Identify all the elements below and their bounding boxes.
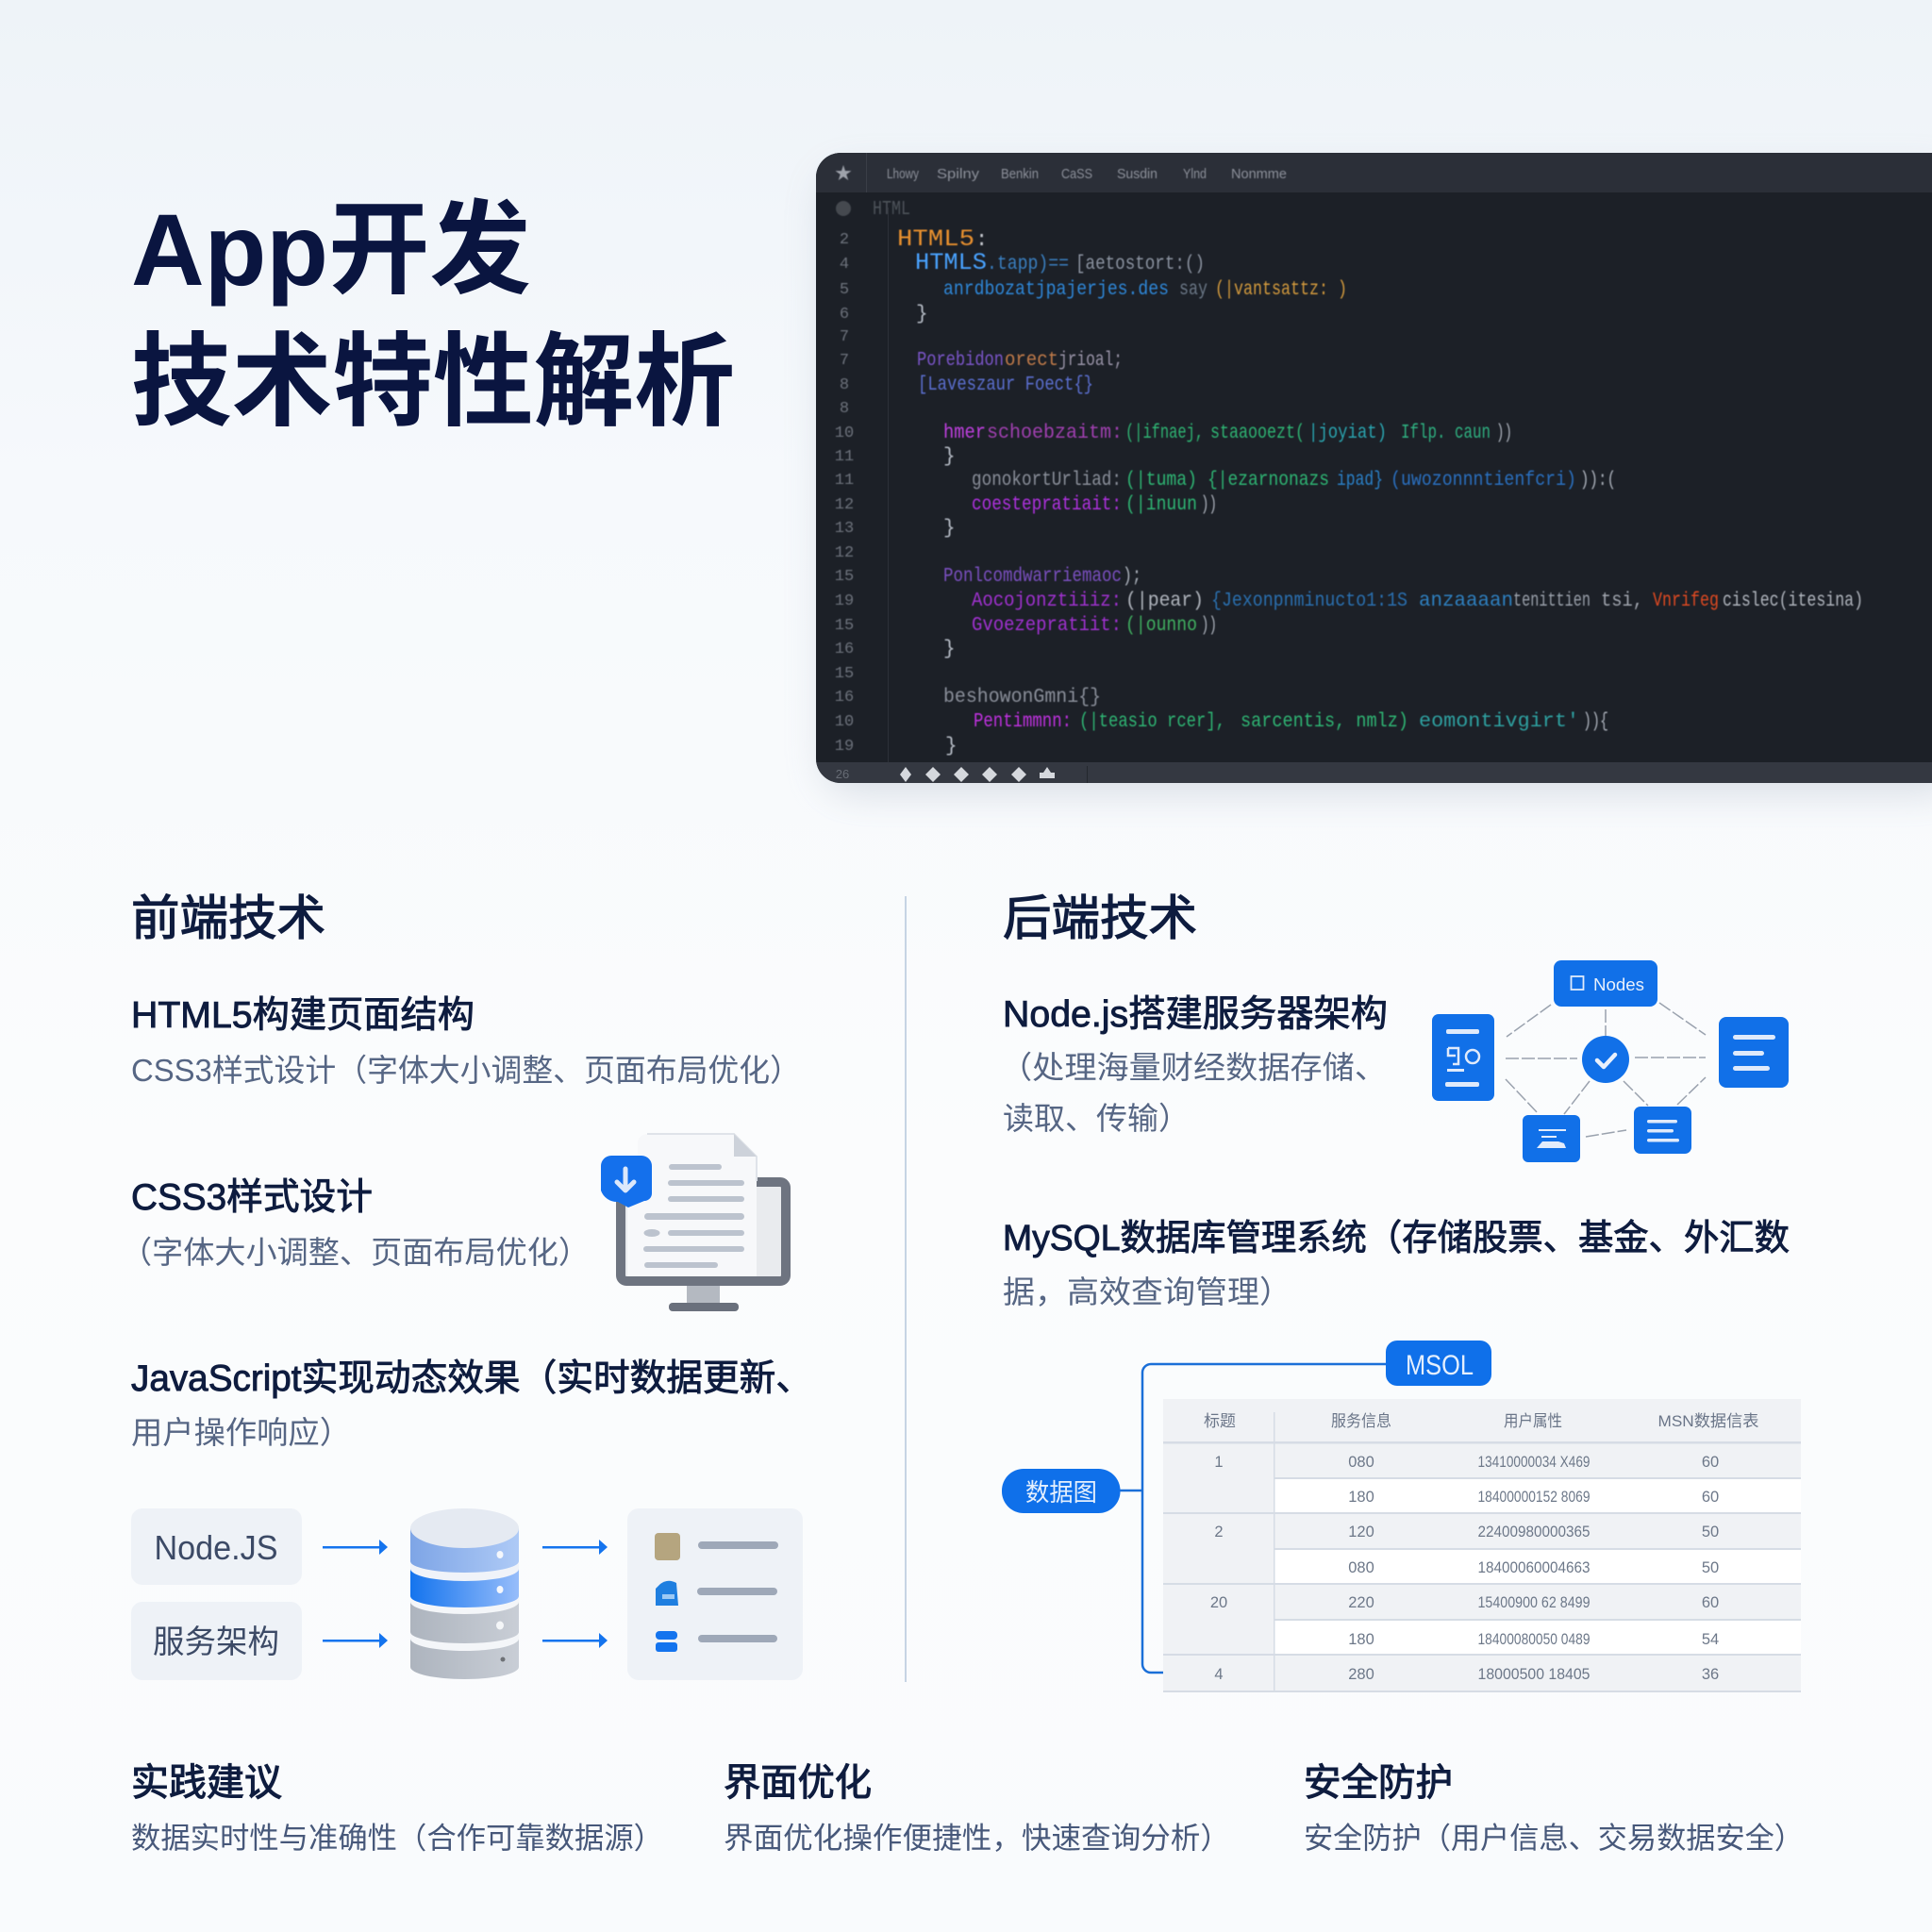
code lines: } <box>943 639 956 660</box>
text block: MySQL <box>1003 1219 1790 1309</box>
text block: HTML5: HTML5构建页面结构 <box>131 995 475 1036</box>
text block: HTML5 <box>131 995 801 1088</box>
text block: Node.js: 读取、传输） <box>1003 1101 1190 1136</box>
table header <box>1204 1412 1758 1430</box>
code lines: } <box>943 518 956 540</box>
pill: 数据图: 数据图 <box>1025 1478 1097 1507</box>
text block: CSS3 <box>121 1177 590 1270</box>
code lines: orect <box>1005 350 1058 372</box>
table rows: 220 <box>1348 1594 1374 1611</box>
code lines: anrdbozatjpajerjes.des <box>943 279 1169 301</box>
text block: JavaScript: JavaScript实现动态效果（实时数据更新、 <box>131 1358 812 1399</box>
editor toolbar: Spilny <box>937 166 980 182</box>
table <box>1163 1399 1801 1692</box>
code lines: {Jexonpnminucto1:1S <box>1211 591 1407 612</box>
table rows: 60 <box>1702 1489 1719 1506</box>
text block: Node.js: Node.js搭建服务器架构 <box>1003 994 1388 1035</box>
editor status bar icons <box>836 766 1088 783</box>
editor toolbar: Benkin <box>1001 166 1039 182</box>
code lines: Ponlcomdwarriemaoc <box>943 566 1122 588</box>
code lines: )) <box>1201 494 1217 516</box>
code lines: eomontivgirt' <box>1419 711 1579 733</box>
chip: Node.JS: Node.JS <box>155 1528 277 1567</box>
icon: database <box>410 1508 519 1679</box>
chip: Node.JS <box>131 1508 302 1585</box>
line numbers: 10 <box>835 713 854 731</box>
block: 实践建议: 数据实时性与准确性（合作可靠数据源） <box>131 1821 663 1855</box>
code lines: Iflp. caun <box>1401 423 1491 444</box>
code lines: {|ezarnonazs <box>1208 470 1329 491</box>
line numbers: 11 <box>835 472 854 490</box>
line numbers: 8 <box>840 400 849 418</box>
code lines: jrioal; <box>1058 350 1123 372</box>
code lines: (|teasio rcer], <box>1079 711 1225 733</box>
editor toolbar: Ylnd <box>1183 166 1207 182</box>
button: MSOL: MSOL <box>1406 1350 1474 1381</box>
heading: 前端技术: 前端技术 <box>131 891 325 945</box>
table rows: 22400980000365 <box>1477 1524 1591 1541</box>
code lines: cislec(itesina) <box>1723 591 1863 612</box>
code lines: (|ounno <box>1125 615 1197 637</box>
line numbers: 15 <box>835 568 854 586</box>
code lines: say <box>1179 279 1208 301</box>
table rows: 1 <box>1214 1454 1224 1471</box>
connectors <box>1506 1003 1706 1137</box>
table rows: 50 <box>1702 1559 1719 1576</box>
chip: 服务架构 <box>131 1602 302 1680</box>
node: bottom left <box>1523 1115 1580 1162</box>
code lines: |joyiat) <box>1308 423 1387 444</box>
code lines: ipad} <box>1337 470 1383 491</box>
table header: 标题 <box>1204 1412 1236 1430</box>
table rows: 18000500 18405 <box>1477 1666 1591 1683</box>
code lines: schoebzaitm: <box>987 423 1123 444</box>
code lines: HTMLS <box>915 249 987 276</box>
block: 界面优化: 界面优化 <box>724 1762 872 1804</box>
code lines: tenittien <box>1513 591 1591 612</box>
text block: Node.js: （处理海量财经数据存储、 <box>1000 1050 1387 1085</box>
table rows: 4 <box>1214 1666 1224 1683</box>
arrows <box>323 1540 608 1648</box>
icon: monitor and document <box>601 1134 786 1311</box>
node: bottom right <box>1634 1107 1691 1154</box>
block: 实践建议: 实践建议 <box>131 1762 282 1804</box>
code lines: Vnrifeg <box>1653 591 1719 612</box>
table rows: 180 <box>1348 1631 1374 1648</box>
code lines: )) <box>1496 423 1512 444</box>
line numbers: 2 <box>840 231 849 249</box>
editor toolbar: Susdin <box>1117 166 1158 182</box>
title: 技术特性解析 <box>131 325 735 439</box>
node: Node.js <box>1554 960 1657 1007</box>
line numbers: 13 <box>835 520 854 538</box>
editor toolbar <box>835 164 1287 183</box>
line numbers: 12 <box>835 544 854 562</box>
line numbers: 19 <box>835 738 854 756</box>
table header: MSN数据信表 <box>1658 1412 1758 1430</box>
editor toolbar: Lhowy <box>887 166 919 182</box>
table rows: 60 <box>1702 1454 1719 1471</box>
code lines: : <box>975 228 988 252</box>
chip: 服务架构: 服务架构 <box>153 1624 279 1660</box>
editor toolbar: CaSS <box>1061 166 1092 182</box>
editor toolbar: ★ <box>835 164 852 183</box>
code lines: hmer <box>943 423 986 444</box>
node: right list <box>1719 1017 1789 1088</box>
code lines <box>873 199 1863 758</box>
code lines: Gvoezepratiit: <box>972 615 1122 637</box>
code lines: (|pear) <box>1125 591 1204 612</box>
table rows: 18400080050 0489 <box>1477 1631 1591 1648</box>
table rows: 20 <box>1210 1594 1227 1611</box>
table rows: 080 <box>1348 1454 1374 1471</box>
pill: 数据图 <box>1002 1469 1121 1513</box>
node: left document <box>1432 1014 1494 1101</box>
panel: code editor <box>816 153 1932 792</box>
code lines: (|vantsattz: ) <box>1215 279 1347 301</box>
table rows: 50 <box>1702 1524 1719 1541</box>
code lines: HTML <box>873 199 910 221</box>
text block: MySQL: MySQL数据库管理系统（存储股票、基金、外汇数 <box>1003 1219 1790 1258</box>
line numbers: 15 <box>835 665 854 683</box>
code lines: )) <box>1201 615 1217 637</box>
line numbers: 19 <box>835 592 854 610</box>
block: 界面优化 <box>724 1762 1230 1855</box>
code lines: (|inuun <box>1125 494 1197 516</box>
text block: CSS3: （字体大小调整、页面布局优化） <box>121 1235 590 1270</box>
code lines: sarcentis, nmlz) <box>1241 711 1408 733</box>
code lines: .tapp)== <box>987 254 1069 275</box>
block: 实践建议 <box>131 1762 663 1855</box>
text block: HTML5: CSS3样式设计（字体大小调整、页面布局优化） <box>131 1053 801 1088</box>
line numbers: 7 <box>840 352 849 370</box>
line numbers: 15 <box>835 617 854 635</box>
divider <box>905 896 907 1682</box>
table rows: 180 <box>1348 1489 1374 1506</box>
editor status bar icons: 26 <box>836 767 849 781</box>
code lines: Porebidon <box>917 350 1004 372</box>
connectors <box>1120 1364 1386 1673</box>
code lines: } <box>945 736 958 758</box>
text block: MySQL: 据，高效查询管理） <box>1003 1274 1291 1309</box>
table rows: 13410000034 X469 <box>1477 1454 1591 1471</box>
code lines: Aocojonztiiiz: <box>972 591 1122 612</box>
diagram: architecture flow <box>131 1508 803 1680</box>
table rows: 280 <box>1348 1666 1374 1683</box>
table rows: 15400900 62 8499 <box>1477 1594 1591 1611</box>
heading: 后端技术: 后端技术 <box>1003 891 1197 945</box>
table rows: 120 <box>1348 1524 1374 1541</box>
code lines: coestepratiait: <box>972 494 1122 516</box>
title: App开发 <box>131 192 531 307</box>
table header: 用户属性 <box>1504 1412 1562 1430</box>
code lines: )):( <box>1580 470 1616 491</box>
line numbers: 10 <box>835 425 854 442</box>
line numbers: 8 <box>840 376 849 394</box>
code lines: } <box>943 446 956 468</box>
table rows: 54 <box>1702 1631 1719 1648</box>
line numbers: 4 <box>840 256 849 274</box>
table rows: 60 <box>1702 1594 1719 1611</box>
code lines: } <box>916 304 928 325</box>
code lines: (|tuma) <box>1125 470 1197 491</box>
code lines: beshowonGmni{} <box>943 687 1101 708</box>
line numbers: 7 <box>840 328 849 346</box>
code lines: )){ <box>1583 711 1608 733</box>
code lines: tsi, <box>1601 591 1643 612</box>
button: MSOL <box>1386 1341 1491 1386</box>
code lines: anzaaaan <box>1419 591 1513 612</box>
text block: CSS3: CSS3样式设计 <box>131 1177 373 1218</box>
table rows: 080 <box>1348 1559 1374 1576</box>
code lines: Pentimmnn: <box>974 711 1072 733</box>
code lines: (uwozonnntienfcri) <box>1391 470 1576 491</box>
text block: JavaScript: 用户操作响应） <box>131 1415 351 1450</box>
table rows: 36 <box>1702 1666 1719 1683</box>
line numbers: 11 <box>835 448 854 466</box>
title <box>131 192 735 439</box>
line numbers <box>835 201 854 756</box>
diagram: MySQL table <box>1002 1341 1801 1692</box>
line numbers: 12 <box>835 496 854 514</box>
block: 安全防护: 安全防护（用户信息、交易数据安全） <box>1304 1821 1804 1855</box>
table rows: 18400060004663 <box>1477 1559 1591 1576</box>
code lines: staaooezt( <box>1210 423 1305 444</box>
table rows <box>1210 1454 1719 1683</box>
code lines: [Laveszaur Foect{} <box>918 375 1093 396</box>
table header: 服务信息 <box>1331 1412 1391 1430</box>
code lines: [aetostort:() <box>1075 254 1205 275</box>
code lines: ); <box>1123 566 1141 588</box>
text block: Node.js <box>1000 994 1388 1136</box>
text block: JavaScript <box>131 1358 812 1450</box>
line numbers: 5 <box>840 281 849 299</box>
table rows: 18400000152 8069 <box>1477 1489 1591 1506</box>
code lines: gonokortUrliad: <box>972 470 1122 491</box>
block: 安全防护 <box>1304 1762 1804 1855</box>
block: 界面优化: 界面优化操作便捷性，快速查询分析） <box>724 1821 1230 1855</box>
code lines: (|ifnaej, <box>1125 423 1204 444</box>
diagram: Node.js network <box>1432 960 1789 1162</box>
table rows: 2 <box>1214 1524 1224 1541</box>
block: 安全防护: 安全防护 <box>1304 1762 1453 1804</box>
line numbers: 16 <box>835 689 854 707</box>
line numbers: 16 <box>835 641 854 658</box>
node: Node.js: Nodes <box>1593 975 1644 994</box>
editor toolbar: Nonmme <box>1231 166 1287 182</box>
node: center check <box>1582 1036 1629 1083</box>
line numbers: 6 <box>840 306 849 324</box>
code lines: HTML5 <box>897 225 974 253</box>
panel: output list <box>627 1508 803 1680</box>
